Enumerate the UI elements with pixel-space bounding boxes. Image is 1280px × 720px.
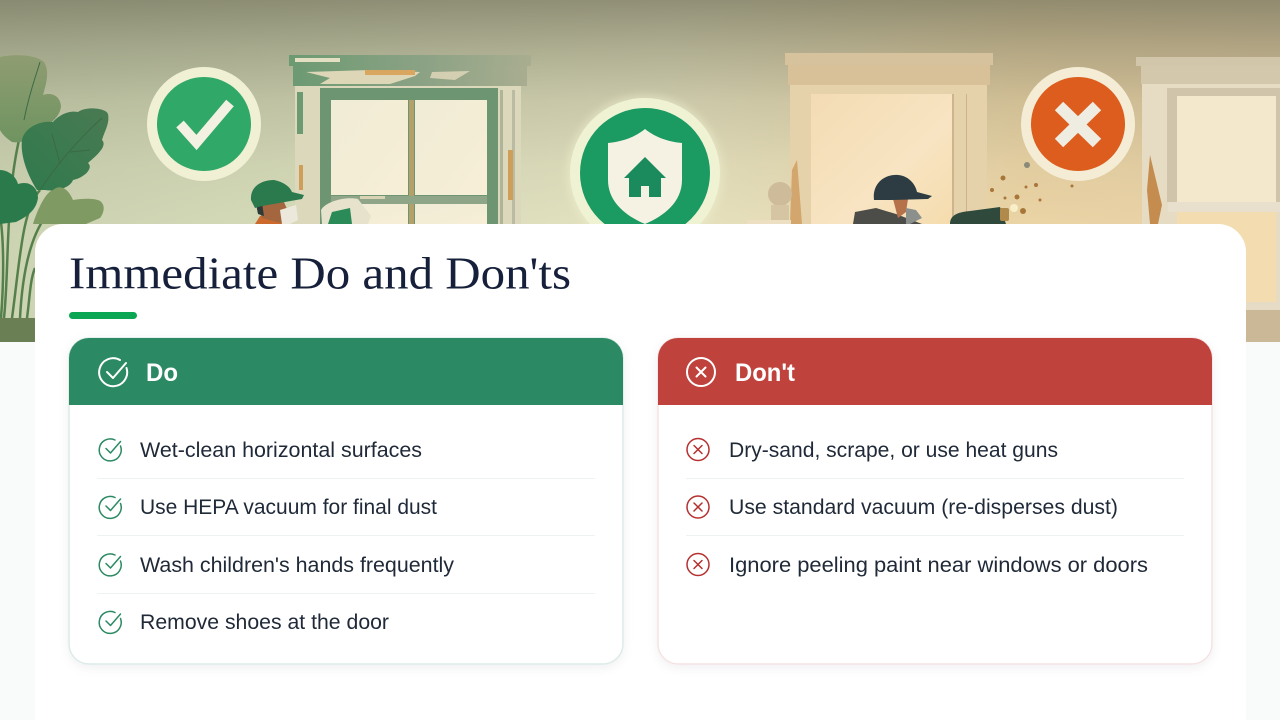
window: right <box>1136 57 1280 342</box>
badge: cross <box>1021 67 1135 181</box>
don't item 3: Ignore peeling paint near windows or doors <box>729 554 1148 577</box>
do header band <box>69 338 623 405</box>
worker: heat gun <box>853 175 1009 224</box>
title: Immediate Do and Don'ts <box>69 248 571 298</box>
title underline <box>69 312 137 319</box>
do heading: Do <box>146 359 178 387</box>
panel: don't <box>658 338 1212 664</box>
paint sparks <box>990 162 1074 214</box>
do item 3: Wash children's hands frequently <box>140 554 454 577</box>
don't heading: Don't <box>735 359 796 387</box>
badge: shield and house <box>567 95 723 251</box>
worker: wiping window <box>251 180 371 224</box>
don't header band <box>658 338 1212 405</box>
badge: check <box>147 67 261 181</box>
newel post <box>747 182 792 224</box>
window: warm frame <box>785 53 993 224</box>
hero illustration <box>0 0 1280 342</box>
icon: don't header cross <box>687 358 715 386</box>
don't item 2: Use standard vacuum (re-disperses dust) <box>729 496 1118 519</box>
window: peeling green <box>289 55 531 224</box>
do item 4: Remove shoes at the door <box>140 611 389 634</box>
panel: do <box>69 338 623 664</box>
do item 1: Wet-clean horizontal surfaces <box>140 439 422 462</box>
do item 2: Use HEPA vacuum for final dust <box>140 496 437 519</box>
plant <box>0 55 108 342</box>
main white card <box>35 224 1246 720</box>
icon: do header check <box>99 358 127 386</box>
don't item 1: Dry-sand, scrape, or use heat guns <box>729 439 1058 462</box>
